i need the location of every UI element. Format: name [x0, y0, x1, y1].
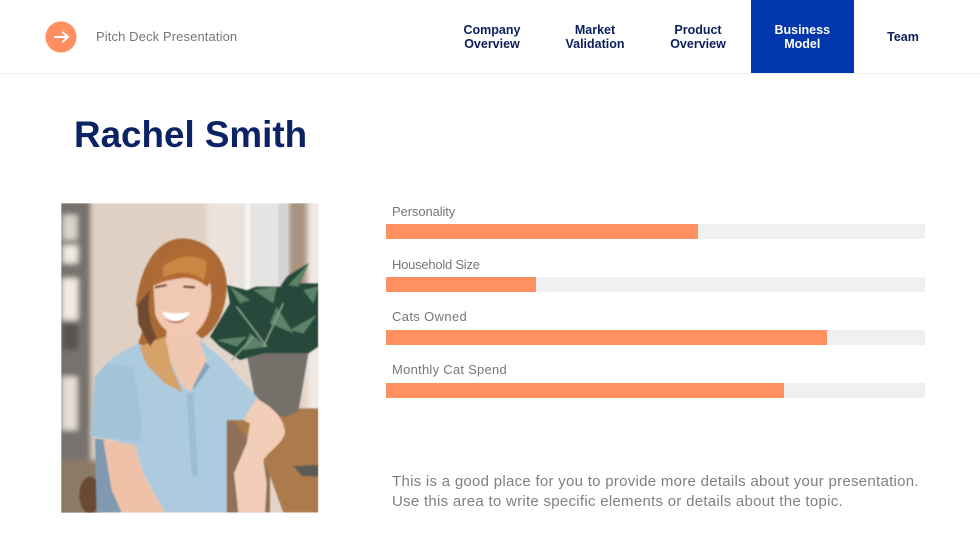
arm right [234, 398, 285, 513]
hair strand [139, 337, 183, 393]
heading: name: Rachel Smith [74, 114, 307, 155]
nav: product overview: Overview [670, 37, 726, 51]
header bar [0, 0, 980, 74]
description text [392, 473, 919, 510]
face [153, 277, 211, 337]
nav: market validation: Market [575, 23, 615, 37]
photo: smiling woman by a window [61, 203, 318, 513]
nav: market validation [565, 23, 625, 51]
arm left [103, 440, 165, 513]
pot [247, 353, 308, 417]
phone [293, 465, 318, 477]
hair fringe [152, 276, 211, 287]
nav: company overview: Overview [464, 37, 520, 51]
nav: business model active [751, 0, 854, 74]
plant [210, 263, 318, 360]
nav: company overview [464, 23, 520, 51]
hair back [136, 238, 227, 347]
label: cats owned: Cats Owned [392, 309, 467, 324]
mouth [162, 312, 190, 321]
label: household size: Household Size [392, 257, 480, 272]
stool [79, 477, 101, 513]
nav: product overview [670, 23, 726, 51]
description text: Use this area to write specific elements or details about the topic. [392, 493, 843, 510]
description text: This is a good place for you to provide more details about your presentation. [392, 473, 919, 490]
table [227, 420, 270, 513]
nav: company overview: Company [464, 23, 520, 37]
nav: team: Team [887, 30, 919, 44]
deck title: Pitch Deck Presentation [96, 29, 237, 44]
bar: monthly cat spend [386, 383, 925, 398]
label: personality: Personality [392, 204, 455, 219]
nav: business model active: Model [784, 37, 820, 51]
nav: market validation: Validation [565, 37, 625, 51]
shirt [91, 340, 258, 513]
bar: personality [386, 224, 925, 239]
nav: product overview: Product [674, 23, 722, 37]
label: monthly cat spend: Monthly Cat Spend [392, 362, 507, 377]
bar: household size [386, 277, 925, 292]
bar: cats owned [386, 330, 925, 345]
icon: orange arrow circle [46, 22, 76, 52]
neck [165, 330, 207, 392]
nav: business model active: Business [774, 23, 830, 37]
